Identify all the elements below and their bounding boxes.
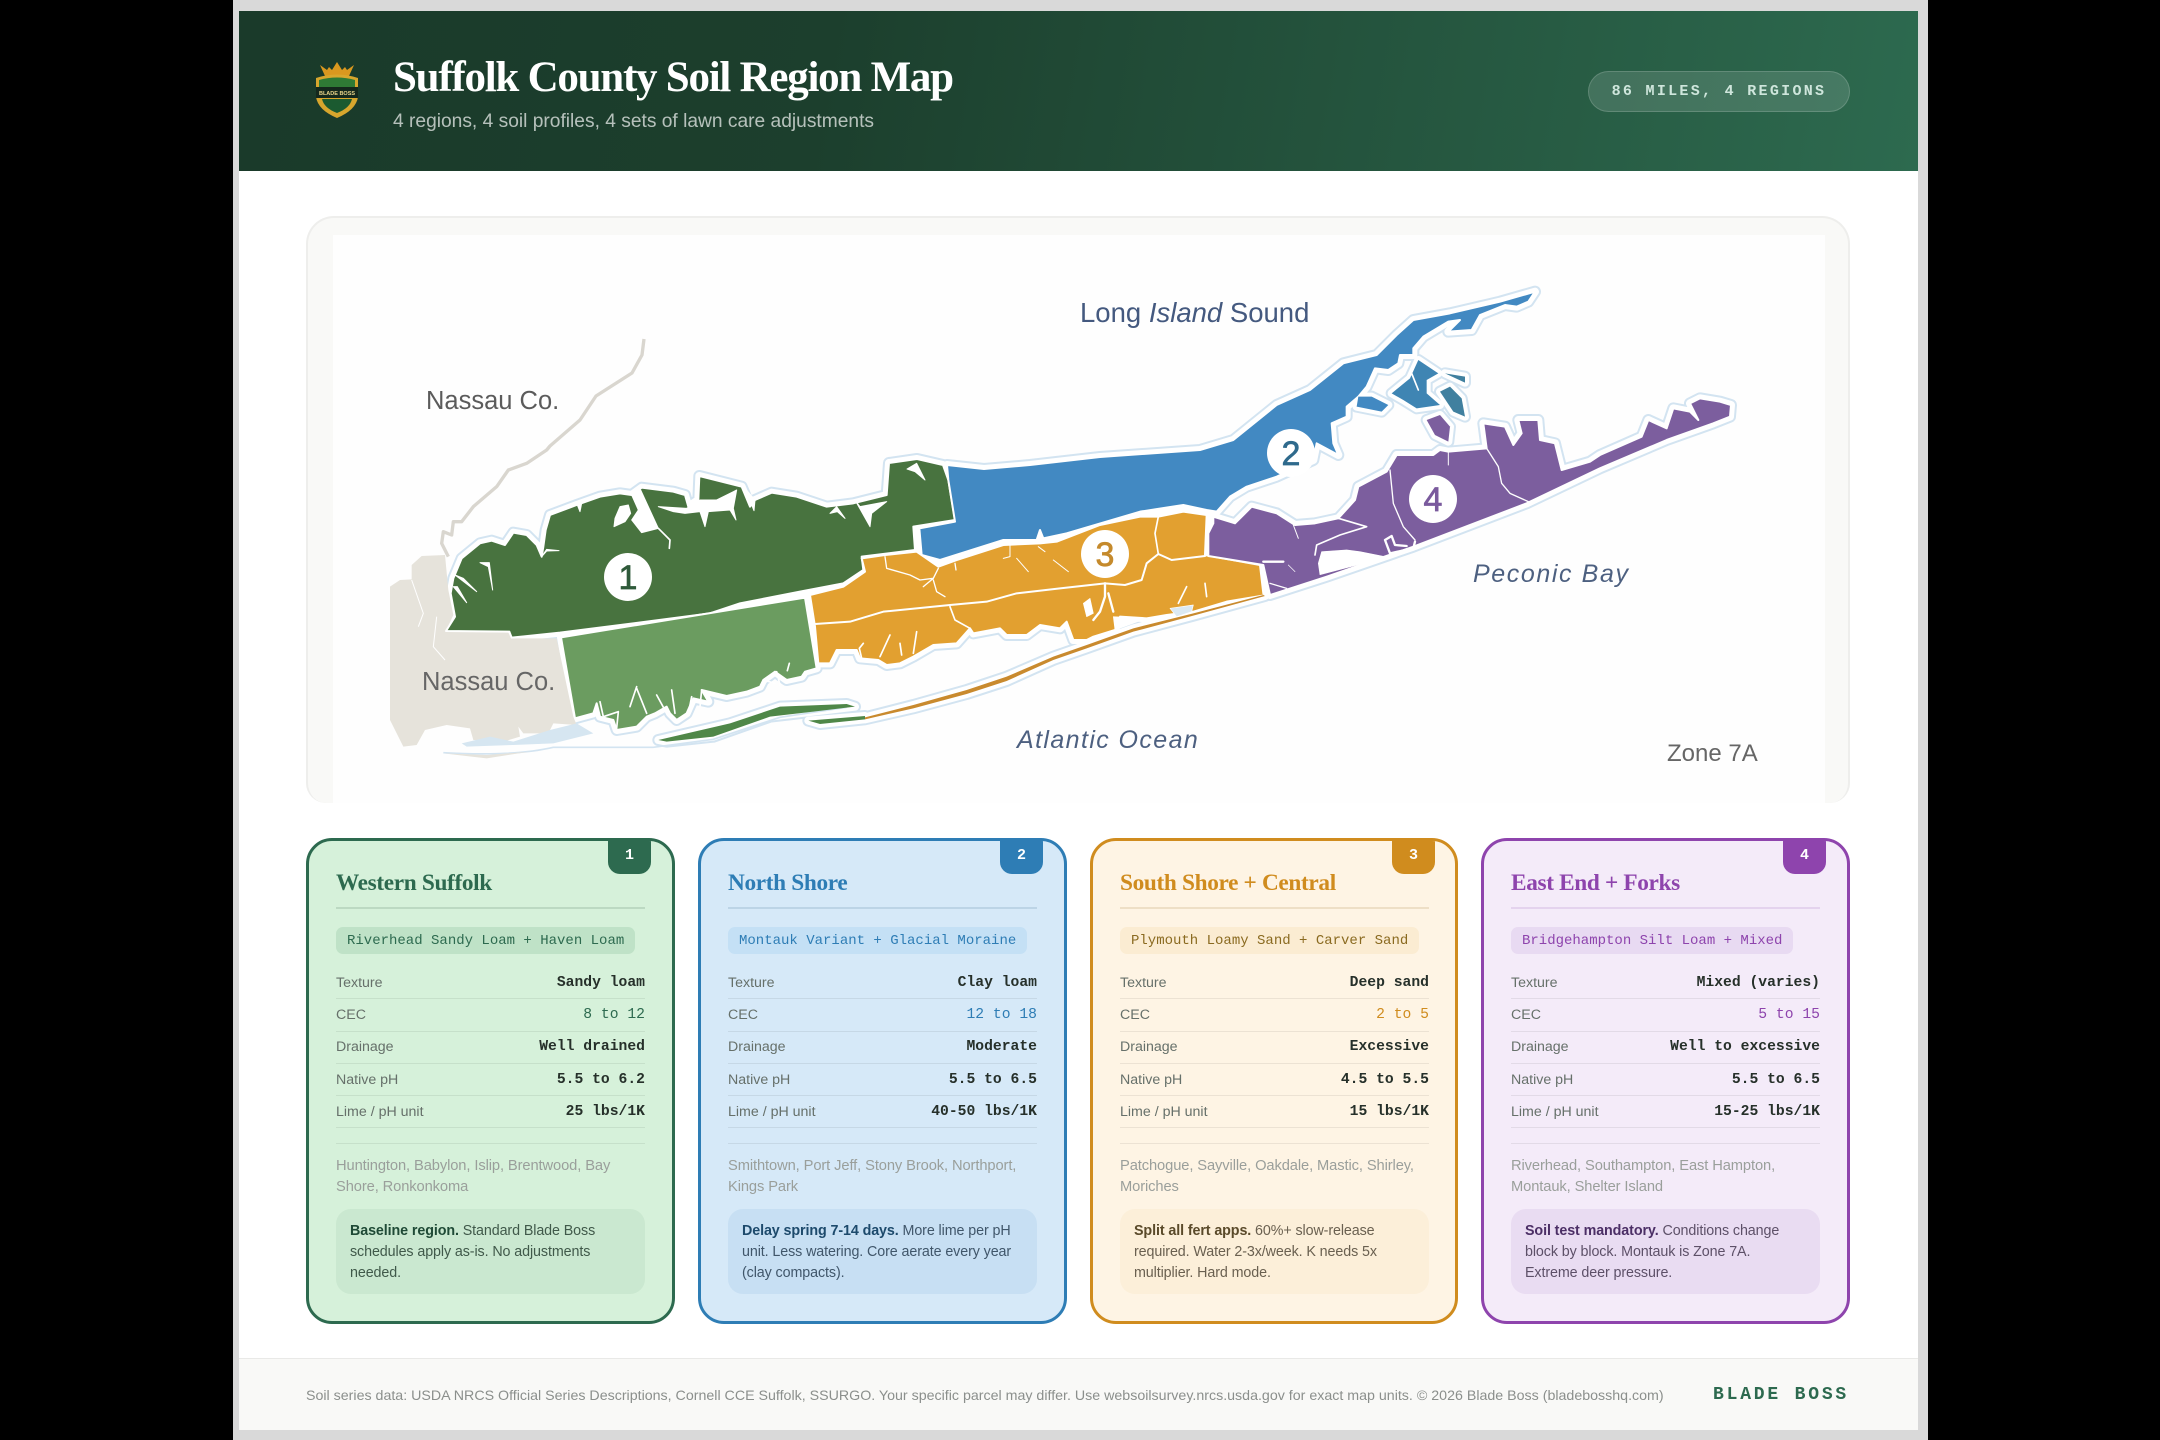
soil stats: Well to excessive	[1670, 1039, 1820, 1055]
region number 2: 2	[1282, 435, 1300, 473]
note: Delay spring 7-14 days. More lime per pH unit. Less watering. Core aerate every year (clay compacts).	[742, 1223, 1011, 1281]
badge 3: 3	[1409, 847, 1418, 864]
white inlets in region 1	[453, 463, 925, 603]
soil stats: Drainage	[728, 1039, 786, 1055]
subtitle: 4 regions, 4 soil profiles, 4 sets of lawn care adjustments	[393, 111, 874, 132]
towns: Smithtown, Port Jeff, Stony Brook, Northport,	[728, 1158, 1016, 1174]
region number 1	[604, 553, 652, 601]
badge 3	[1392, 838, 1435, 874]
region number 3	[1081, 530, 1129, 578]
soil tag	[1511, 927, 1793, 954]
soil stats: 15-25 lbs/1K	[1714, 1104, 1820, 1120]
white page	[239, 11, 1918, 1430]
footer bar	[239, 1358, 1918, 1430]
region number 3: 3	[1096, 536, 1114, 574]
footer brand: BLADE BOSS	[1713, 1385, 1849, 1405]
towns: Moriches	[1120, 1179, 1179, 1195]
soil stats: Texture	[336, 975, 383, 991]
region 1 dark green	[446, 459, 955, 638]
stat pill: 86 MILES, 4 REGIONS	[1612, 83, 1826, 100]
towns: Riverhead, Southampton, East Hampton,	[1511, 1158, 1775, 1174]
label: Long Island Sound: Long Island Sound	[1080, 297, 1309, 328]
soil stats: CEC	[1120, 1007, 1150, 1023]
region number 4: 4	[1424, 481, 1442, 519]
badge 4: 4	[1800, 847, 1809, 864]
soil tag: Riverhead Sandy Loam + Haven Loam	[347, 933, 624, 949]
heading: Western Suffolk	[336, 870, 492, 896]
icon: Blade Boss shield logo	[316, 62, 358, 118]
soil stats: 5.5 to 6.2	[557, 1072, 645, 1088]
footer source note: Soil series data: USDA NRCS Official Series Descriptions, Cornell CCE Suffolk, SSURGO. Your specific parcel may differ. Use websoilsurvey.nrcs.usda.gov for exact map units. © 2026 Blade Boss (bladebosshq.com)	[306, 1388, 1664, 1404]
soil stats: 4.5 to 5.5	[1341, 1072, 1429, 1088]
badge 4	[1783, 838, 1826, 874]
heading: South Shore + Central	[1120, 870, 1336, 896]
label: Peconic Bay: Peconic Bay	[1473, 560, 1630, 588]
note	[336, 1209, 645, 1294]
note: block by block. Montauk is Zone 7A.	[1525, 1244, 1750, 1260]
soil stats: 2 to 5	[1376, 1007, 1429, 1023]
badge 2	[1000, 838, 1043, 874]
soil stats	[1120, 975, 1429, 1128]
label: Atlantic Ocean: Atlantic Ocean	[1015, 726, 1199, 754]
soil stats: 5 to 15	[1758, 1007, 1820, 1023]
soil stats: Lime / pH unit	[728, 1104, 816, 1120]
soil tag: Montauk Variant + Glacial Moraine	[739, 933, 1016, 949]
soil stats: Sandy loam	[557, 975, 645, 991]
note	[1511, 1209, 1820, 1294]
heading: North Shore	[728, 870, 847, 896]
soil stats: Texture	[728, 975, 775, 991]
towns	[336, 1158, 610, 1195]
soil tag: Bridgehampton Silt Loam + Mixed	[1522, 933, 1782, 949]
white inlets in region 1 south	[600, 528, 789, 728]
soil stats: Native pH	[1120, 1072, 1182, 1088]
panel: map frame	[306, 216, 1850, 803]
region 3 orange	[810, 512, 1267, 665]
towns: Patchogue, Sayville, Oakdale, Mastic, Shirley,	[1120, 1158, 1414, 1174]
soil stats: 8 to 12	[583, 1007, 645, 1023]
soil tag: Plymouth Loamy Sand + Carver Sand	[1131, 933, 1408, 949]
page sheet	[233, 0, 1928, 1440]
soil tag	[728, 927, 1027, 954]
label: Nassau Co. lower: Nassau Co.	[422, 668, 555, 696]
towns	[1511, 1158, 1775, 1195]
soil stats: Texture	[1511, 975, 1558, 991]
towns: Montauk, Shelter Island	[1511, 1179, 1663, 1195]
soil stats: 40-50 lbs/1K	[931, 1104, 1037, 1120]
note: Extreme deer pressure.	[1525, 1265, 1672, 1281]
region number 2	[1267, 429, 1315, 477]
soil stats: CEC	[336, 1007, 366, 1023]
county border line	[442, 339, 644, 557]
badge 2: 2	[1017, 847, 1026, 864]
soil stats: Lime / pH unit	[336, 1104, 424, 1120]
towns	[1120, 1158, 1414, 1195]
panel: East End + Forks card	[1481, 838, 1850, 1324]
region number 4	[1409, 475, 1457, 523]
soil stats: Deep sand	[1350, 975, 1429, 991]
soil stats: Mixed (varies)	[1697, 975, 1820, 991]
note: Baseline region. Standard Blade Boss schedules apply as-is. No adjustments needed.	[350, 1223, 595, 1281]
panel: North Shore card	[698, 838, 1067, 1324]
white lines in region 3	[815, 517, 1207, 658]
header banner	[239, 11, 1918, 171]
soil stats: 5.5 to 6.5	[1732, 1072, 1820, 1088]
soil stats: Drainage	[1511, 1039, 1569, 1055]
label: Zone 7A: Zone 7A	[1667, 740, 1758, 767]
soil stats: Texture	[1120, 975, 1167, 991]
soil stats: 25 lbs/1K	[566, 1104, 645, 1120]
note	[728, 1209, 1037, 1294]
region 4 purple	[1208, 398, 1731, 595]
note: Split all fert apps. 60%+ slow-release required. Water 2-3x/week. K needs 5x multiplier. Hard mode.	[1134, 1223, 1377, 1281]
stat pill	[1588, 71, 1850, 112]
soil stats	[336, 975, 645, 1128]
north fork islands	[1357, 360, 1465, 442]
panel: South Shore + Central card	[1090, 838, 1458, 1324]
title: Suffolk County Soil Region Map	[393, 54, 953, 101]
soil stats: 5.5 to 6.5	[949, 1072, 1037, 1088]
soil stats: Well drained	[539, 1039, 645, 1055]
badge 1	[608, 838, 651, 874]
towns: Huntington, Babylon, Islip, Brentwood, Bay	[336, 1158, 610, 1174]
shoreline halo	[446, 292, 1731, 742]
soil stats: Drainage	[336, 1039, 394, 1055]
barrier beaches	[658, 595, 1265, 742]
badge 1: 1	[625, 847, 634, 864]
south shore halo line	[443, 707, 847, 754]
soil stats: Drainage	[1120, 1039, 1178, 1055]
soil stats	[1511, 975, 1820, 1128]
soil stats: Native pH	[1511, 1072, 1573, 1088]
soil stats: 12 to 18	[966, 1007, 1037, 1023]
Nassau County land	[390, 555, 593, 758]
heading: East End + Forks	[1511, 870, 1680, 896]
region 1 light green	[561, 598, 817, 730]
white lines in region 4	[1263, 373, 1528, 588]
panel: Western Suffolk card	[306, 838, 675, 1324]
icon: Blade Boss shield logo: BLADE BOSS	[319, 91, 355, 97]
soil tag	[1120, 927, 1419, 954]
soil stats: Excessive	[1350, 1039, 1429, 1055]
soil stats: Native pH	[336, 1072, 398, 1088]
note	[1120, 1209, 1429, 1294]
soil stats: Native pH	[728, 1072, 790, 1088]
soil stats: Lime / pH unit	[1120, 1104, 1208, 1120]
region 2 blue	[919, 292, 1535, 560]
soil stats	[728, 975, 1037, 1128]
towns	[728, 1158, 1016, 1195]
soil stats: CEC	[728, 1007, 758, 1023]
soil stats: 15 lbs/1K	[1350, 1104, 1429, 1120]
soil stats: Moderate	[966, 1039, 1037, 1055]
towns: Shore, Ronkonkoma	[336, 1179, 468, 1195]
label: Nassau Co. upper: Nassau Co.	[426, 387, 559, 415]
towns: Kings Park	[728, 1179, 798, 1195]
note: Soil test mandatory. Conditions change	[1525, 1223, 1779, 1239]
region number 1: 1	[619, 559, 637, 597]
soil stats: Lime / pH unit	[1511, 1104, 1599, 1120]
soil stats: CEC	[1511, 1007, 1541, 1023]
soil tag	[336, 927, 635, 954]
soil stats: Clay loam	[958, 975, 1037, 991]
